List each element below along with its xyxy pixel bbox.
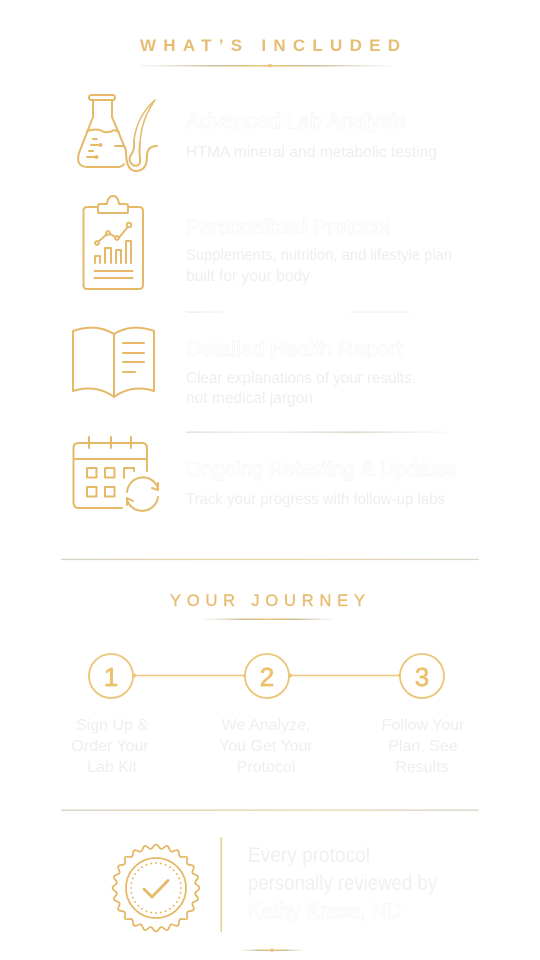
description: HTMA mineral and metabolic testing — [186, 144, 437, 161]
icon: clipboard with chart — [84, 196, 143, 289]
description: Supplements, nutrition, and lifestyle plan — [186, 247, 452, 264]
step 1 label: Order Your — [71, 738, 149, 755]
step 3: 3 — [415, 662, 429, 692]
description: Clear explanations of your results, — [186, 370, 416, 387]
step 1: 1 — [104, 662, 118, 692]
bottom ornament — [241, 948, 303, 952]
step 2 label: You Get Your — [219, 738, 314, 755]
panel: ongoing retesting and updates — [74, 437, 456, 511]
icon: open book — [73, 328, 154, 397]
step 3 label: Results — [395, 759, 449, 776]
icon: flask and hair follicle — [78, 95, 157, 171]
step 2 label: We Analyze, — [222, 717, 310, 734]
description: built for your body — [186, 268, 310, 285]
step 2 — [245, 654, 289, 698]
step 1 label: Lab Kit — [87, 759, 137, 776]
title: what's included: WHAT’S INCLUDED — [140, 36, 400, 55]
description — [186, 370, 416, 407]
heading: Advanced Lab Analysis — [186, 110, 406, 133]
step 2 label — [219, 717, 314, 776]
reviewed by text — [248, 844, 437, 923]
title underline ornament — [140, 64, 390, 67]
step 3 label — [382, 717, 465, 776]
journey steps timeline — [71, 654, 465, 776]
heading: Personalized Protocol — [186, 216, 390, 239]
panel: personalized protocol — [84, 196, 452, 289]
title: your journey: YOUR JOURNEY — [170, 592, 365, 610]
description: Track your progress with follow-up labs — [186, 491, 445, 508]
description: not medical jargon — [186, 390, 313, 407]
icon: seal with checkmark — [112, 844, 200, 932]
step 2 label: Protocol — [237, 759, 295, 776]
reviewed by text: Every protocol — [248, 844, 370, 867]
step 1 — [89, 654, 133, 698]
step 3 label: Plan, See — [388, 738, 458, 755]
panel: advanced lab analysis — [78, 95, 437, 171]
journey underline ornament — [204, 618, 334, 620]
heading: Ongoing Retesting & Updates — [186, 458, 456, 481]
connector lines — [133, 674, 401, 677]
description — [186, 247, 452, 285]
reviewed by text: personally reviewed by — [248, 872, 437, 895]
reviewed by text: Kathy Krase, ND — [248, 900, 401, 923]
step 1 label — [71, 717, 149, 776]
step 2: 2 — [260, 662, 274, 692]
step 3 — [400, 654, 444, 698]
panel: detailed health report — [73, 328, 416, 407]
step 1 label: Sign Up & — [76, 717, 148, 734]
heading: Detailed Health Report — [186, 338, 402, 361]
step 3 label: Follow Your — [382, 717, 465, 734]
icon: calendar with refresh arrows — [74, 437, 158, 511]
